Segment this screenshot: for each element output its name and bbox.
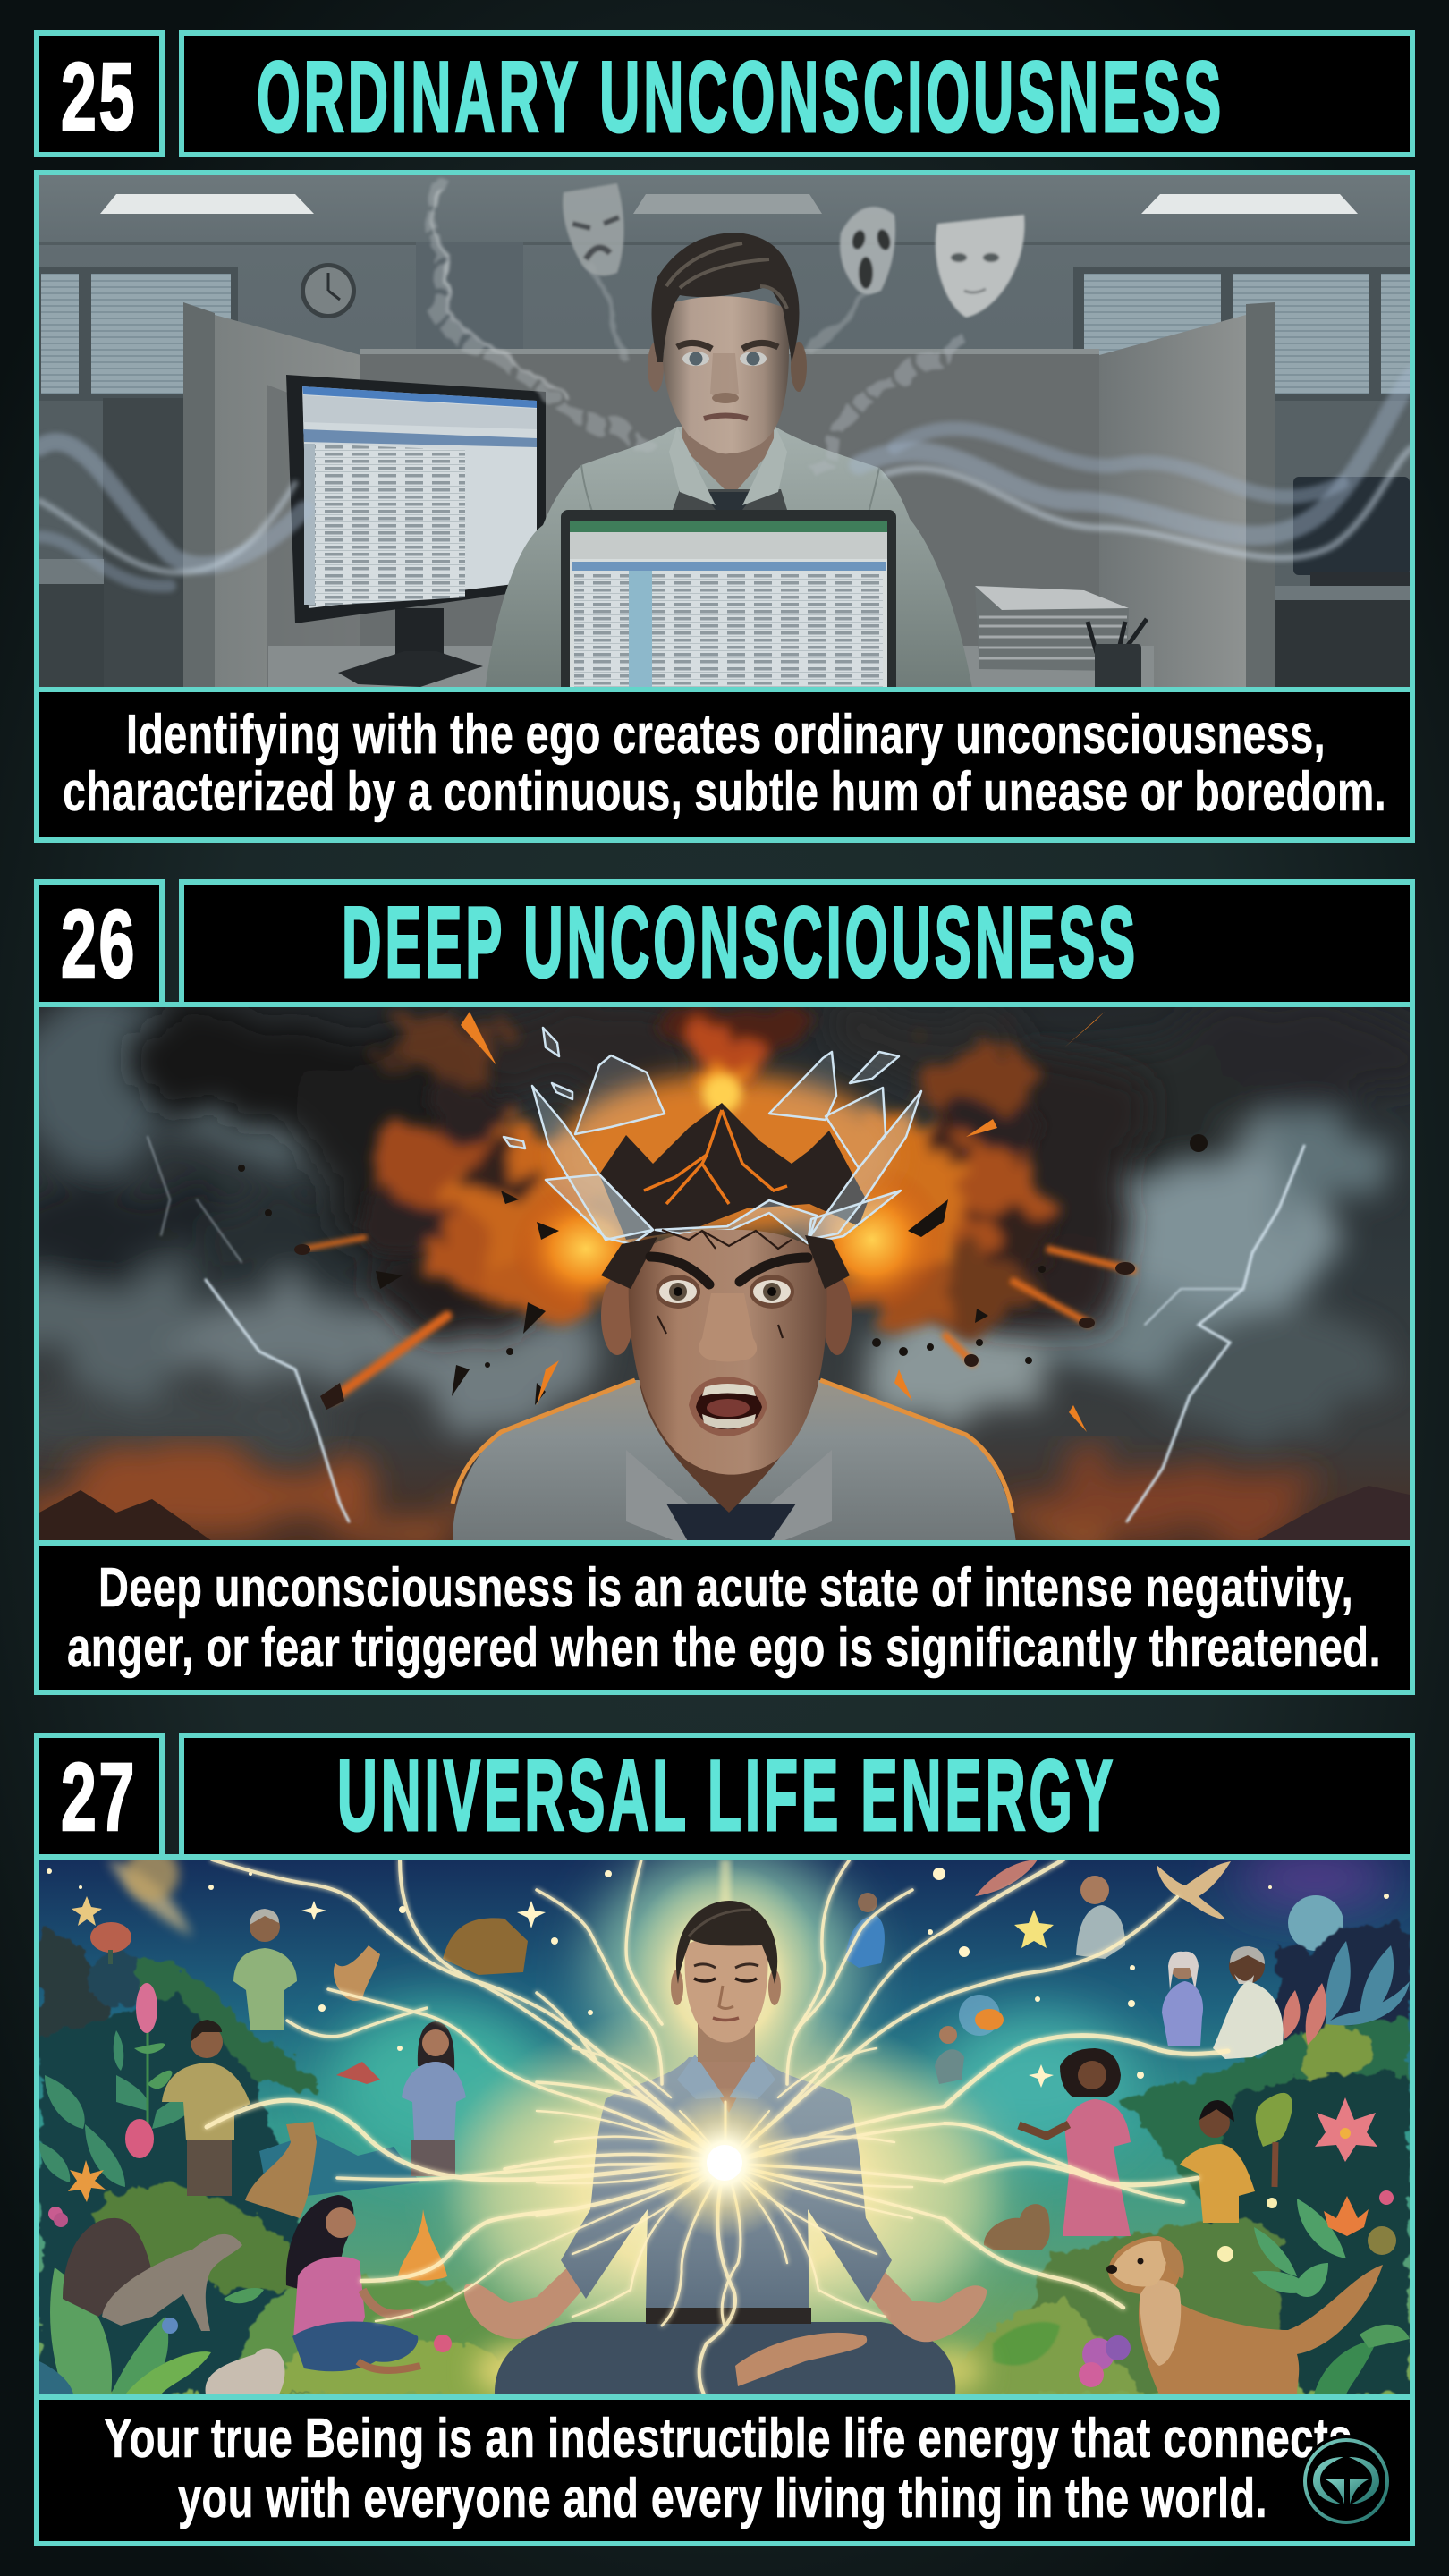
ceiling lights [100,194,1358,214]
energy halo [439,1860,1012,2375]
mushroom tree [90,1922,131,1964]
nebula and background glow [331,1852,1395,2308]
stars [47,1868,1389,2088]
stack of papers and pen cup [975,586,1147,691]
cubicle walls [183,302,1275,693]
flowing energy lines [207,1860,1228,2394]
storm clouds [0,1003,1449,1454]
desktop monitor with spreadsheet [286,375,546,687]
ghostly smoke chains and masks [433,183,962,479]
number badge 25 [34,30,165,157]
office windows [34,267,1413,401]
distant blue mountains [259,2133,420,2200]
flying debris and fireballs [238,1012,1208,1432]
man shouting [453,1230,1016,1543]
man at desk [485,233,973,693]
left grassy ground [94,2184,572,2394]
ground glow beside legs [474,2343,984,2397]
moon and planets [959,1895,1343,2036]
eruption plume [648,1004,809,1100]
volcano on head [599,1103,868,1240]
section 26: deep unconsciousness [34,879,1415,1695]
illustration panel: erupting head in a storm [34,1002,1415,1548]
meditating man [464,1901,987,2394]
caption 27 [34,2394,1415,2546]
shattered ice crown [504,1028,921,1244]
radiant heart light [648,2087,801,2239]
laptop with spreadsheet [561,510,896,699]
left dark hills [39,1928,320,2394]
black smoke [116,1003,1145,1334]
section 25: ordinary unconsciousness [34,30,1415,843]
ember glow near horizon [18,1454,1333,1544]
logo emblem [1300,2435,1393,2528]
illustration panel: office worker haunted by smoke [34,170,1415,723]
lightning bolts [148,1137,1304,1521]
caption 26 [34,1540,1415,1695]
illustration panel: meditating man connected to all life [34,1854,1415,2400]
number badge 26 [34,879,165,1007]
plants and flowers [39,1941,1410,2394]
people around the scene [162,1876,1284,2371]
number badge 27 [34,1733,165,1860]
caption 25 [34,687,1415,843]
animals [63,1860,1383,2394]
wall clock [301,263,356,318]
right hills [945,1923,1410,2394]
orange fire clouds [362,1012,1051,1325]
section 27: universal life energy [34,1733,1415,2546]
smoke waves [39,376,1413,586]
